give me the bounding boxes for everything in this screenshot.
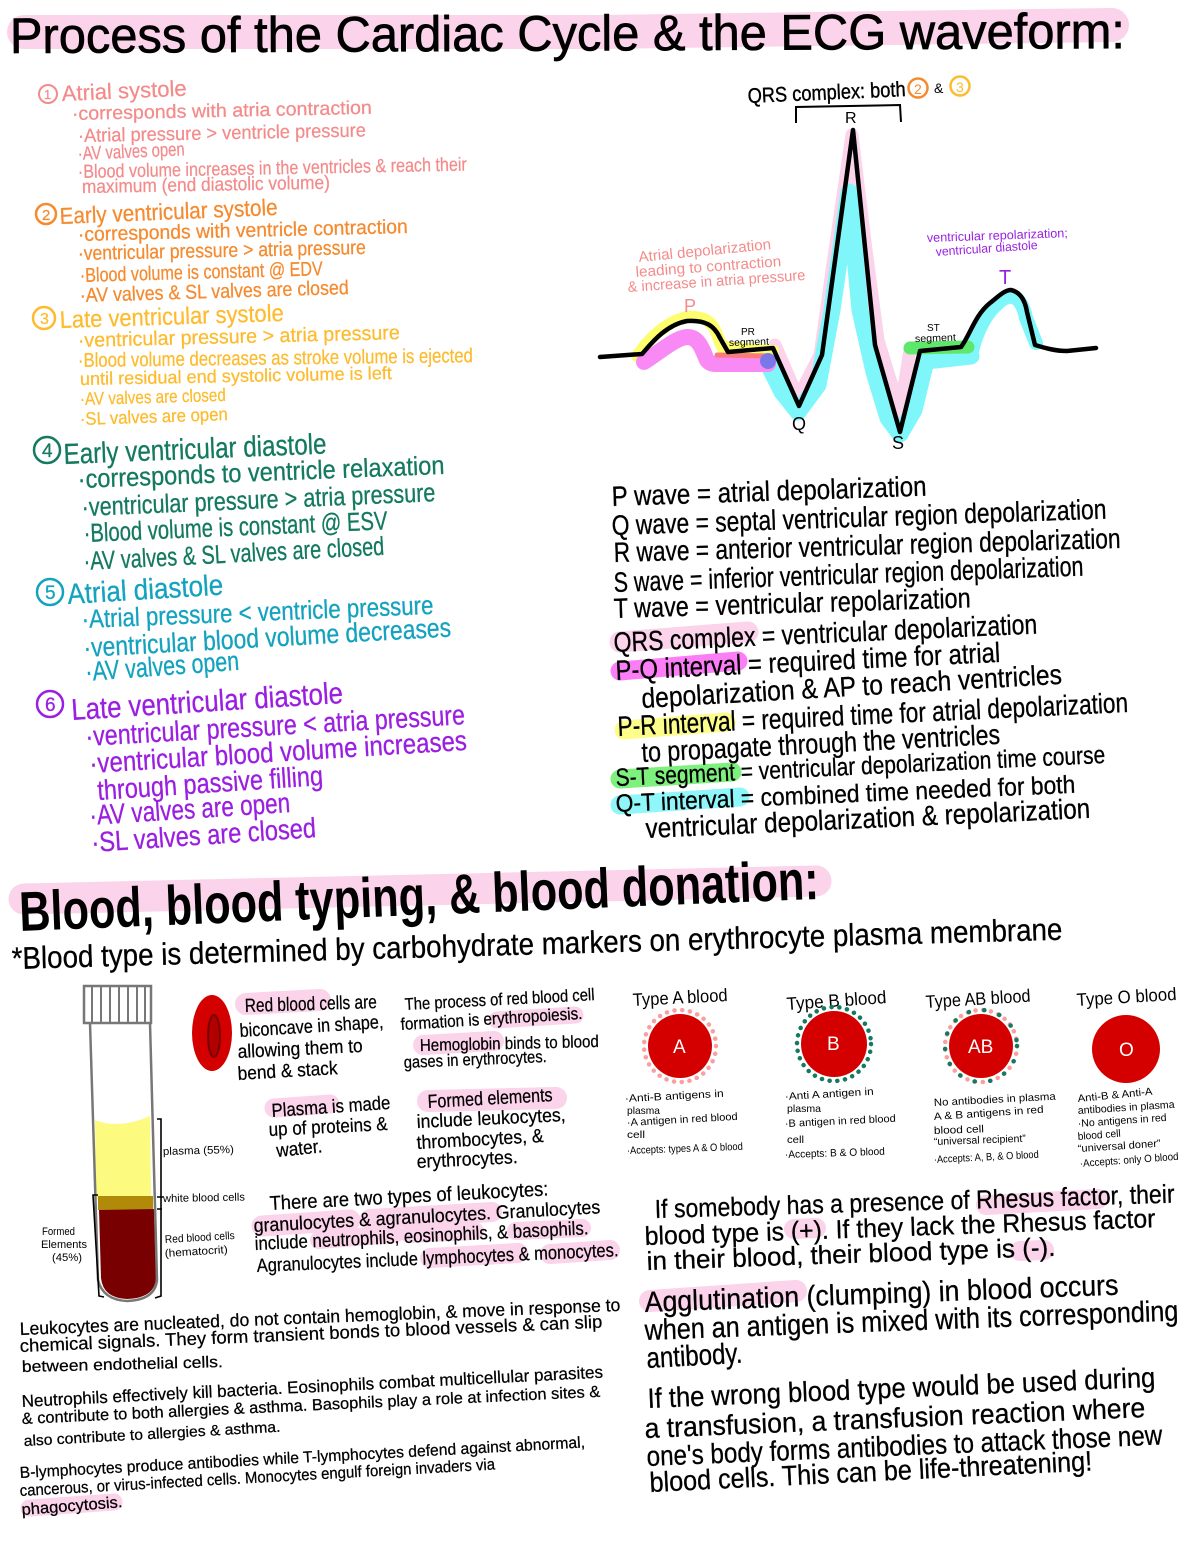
panel: type O blood: blood cell [1077,1128,1121,1143]
panel: type AB blood: A & B antigens in red [933,1104,1044,1123]
panel: agglutination: antibody. [646,1338,743,1375]
QRS complex label and bracket [747,76,970,123]
panel: stage 6 late ventricular diastole: Late ventricular diastole [70,677,344,727]
panel: type O blood: ·No antigens in red [1077,1112,1167,1130]
panel: stage 3 late ventricular systole: ·ventricular pressure > atria pressure [78,322,400,352]
panel: stage 2 early ventricular systole: 2 [42,207,50,224]
panel: stage 1 atrial systole [39,76,468,198]
test tube labels: (hematocrit) [164,1244,228,1260]
P wave note [627,236,806,296]
panel: ECG definitions: T wave = ventricular repolarization [613,582,971,624]
QRS complex label and bracket: QRS complex: both [747,78,906,108]
panel: type AB blood: ·Accepts: A, B, & O blood [934,1149,1039,1166]
panel: type O blood: antibodies in plasma [1077,1099,1175,1117]
test tube labels [41,1144,246,1264]
panel: stage 3 late ventricular systole: ·Blood volume decreases as stroke volume is ejected [78,345,473,372]
panel: stage 3 late ventricular systole: ·AV valves are closed [80,385,226,409]
P wave note: & increase in atria pressure [627,267,806,296]
wave letters: P [684,296,696,316]
panel: blood cell notes: up of proteins & [268,1114,388,1141]
T wave note [927,226,1068,259]
panel: leukocyte details: cancerous, or virus-infected cells. Monocytes engulf foreign invaders via [19,1456,496,1500]
panel: blood cell notes: biconcave in shape, [239,1012,384,1042]
P wave note: Atrial depolarization [638,236,772,266]
panel: blood cell notes: bend & stack [237,1058,339,1085]
panel: type B blood: cell [787,1134,804,1146]
panel: agglutination [643,1270,1179,1375]
panel: ECG definitions: QRS complex = ventricular depolarization [613,609,1038,658]
panel: agglutination: Agglutination (clumping) in blood occurs [644,1270,1119,1319]
panel: stage 2 early ventricular systole: Early ventricular systole [59,194,278,229]
panel: type A blood: ·Accepts: types A & O blood [627,1141,743,1157]
panel: stage 2 early ventricular systole: ·AV valves & SL valves are closed [79,277,349,307]
panel: transfusion reaction: a transfusion, a transfusion reaction where [644,1392,1146,1444]
panel: stage 4 early ventricular diastole: ·Blood volume is constant @ ESV [83,505,388,548]
panel: leukocyte types: granulocytes & agranulocytes. Granulocytes [253,1197,601,1237]
panel: leukocyte details: Neutrophils effectively kill bacteria. Eosinophils combat multicellular parasites [21,1363,603,1411]
panel: stage 5 atrial diastole: ·AV valves open [84,646,240,687]
panel: type B blood: ·B antigen in red blood [785,1113,896,1130]
panel: stage 3 late ventricular systole: Late ventricular systole [59,300,284,334]
panel: stage 1 atrial systole: ·corresponds with atria contraction [72,98,372,125]
panel: leukocyte types: Agranulocytes include lymphocytes & monocytes. [256,1240,619,1277]
panel: leukocyte details: between endothelial cells. [22,1354,223,1376]
panel: stage 4 early ventricular diastole: ·corresponds to ventricle relaxation [77,450,445,494]
icon: red blood cell [192,995,232,1071]
panel: stage 2 early ventricular systole: ·ventricular pressure > atria pressure [78,237,366,265]
panel: stage 1 atrial systole: ·Atrial pressure > ventricle pressure [78,120,366,147]
panel: stage 1 atrial systole: 1 [44,87,51,102]
panel: type O blood: Anti-B & Anti-A [1077,1086,1153,1105]
panel: type AB blood: Type AB blood [925,986,1031,1012]
panel: blood cell notes: Plasma is made [271,1093,391,1122]
segment labels: segment [729,337,769,349]
panel: stage 3 late ventricular systole: 3 [40,311,49,328]
panel: blood cell notes: Red blood cells are [245,992,377,1017]
wave letters: T [999,267,1011,289]
panel: stage 4 early ventricular diastole [34,428,445,576]
panel: stage 4 early ventricular diastole: ·AV valves & SL valves are closed [83,531,385,576]
panel: transfusion reaction: If the wrong blood type would be used during [647,1362,1156,1414]
panel: blood cell notes: gases in erythrocytes. [403,1047,547,1072]
T wave note: ventricular diastole [935,238,1038,259]
panel: type O blood: O [1119,1040,1134,1061]
panel: rhesus factor: blood type is (+). If they lack the Rhesus factor [644,1203,1156,1251]
panel: stage 5 atrial diastole: ·Atrial pressure < ventricle pressure [81,590,434,634]
panel: ECG definitions: depolarization & AP to reach ventricles [641,659,1063,714]
panel: stage 4 early ventricular diastole: 4 [42,441,53,462]
test tube labels: plasma (55%) [163,1144,234,1158]
panel: type O blood: ·Accepts: only O blood [1079,1151,1179,1170]
panel: type A blood: A [673,1037,686,1058]
panel: blood cell notes: water. [274,1136,323,1162]
panel: ECG definitions: P-Q interval = required time for atrial [615,637,1001,686]
panel: transfusion reaction: blood cells. This can be life-threatening! [649,1445,1093,1498]
test tube labels: white blood cells [162,1192,246,1205]
panel: stage 2 early ventricular systole [36,194,408,307]
panel: stage 5 atrial diastole: ·ventricular blood volume decreases [83,612,452,663]
panel: type A blood: ·A antigen in red blood [626,1111,738,1129]
panel: ECG definitions: S-T segment = ventricular depolarization time course [615,741,1106,792]
panel: blood cell notes: formation is erythropoiesis. [400,1004,583,1034]
P wave note: leading to contraction [635,253,782,281]
test tube labels: Elements [41,1239,87,1251]
panel: type O blood: “universal doner” [1077,1138,1162,1155]
panel: ECG definitions: to propagate through the ventricles [641,719,1001,768]
panel: rhesus factor: in their blood, their blood type is (-). [646,1232,1056,1276]
panel: leukocyte details: also contribute to allergies & asthma. [23,1419,281,1450]
panel: stage 6 late ventricular diastole: 6 [45,695,56,716]
panel: blood cell notes: The process of red blood cell [404,985,595,1014]
panel: leukocyte details: chemical signals. They form transient bonds to blood vessels & can slip [19,1312,603,1356]
panel: stage 1 atrial systole: ·AV valves open [77,139,185,165]
panel: blood cell notes: thrombocytes, & [416,1126,544,1154]
panel: stage 2 early ventricular systole: ·corresponds with ventricle contraction [78,216,408,246]
panel: stage 6 late ventricular diastole: ·ventricular pressure < atria pressure [85,699,466,752]
panel: type AB blood: blood cell [934,1123,984,1137]
panel: type AB blood: No antibodies in plasma [934,1091,1056,1109]
diagram: blood test tube [84,986,163,1301]
panel: leukocyte details: phagocytosis. [21,1494,123,1519]
segment labels: ST [927,323,940,334]
wave letters [684,110,1011,453]
test tube labels: (45%) [52,1252,82,1264]
panel: type B blood [784,987,896,1161]
panel: type B blood: B [827,1034,840,1055]
test tube labels: Red blood cells [164,1230,236,1246]
panel: type AB blood [925,986,1056,1166]
T wave note: ventricular repolarization; [927,226,1068,245]
panel: ECG definitions: ventricular depolarization & repolarization [645,793,1091,844]
panel: blood cell notes [237,985,599,1173]
panel: stage 6 late ventricular diastole: through passive filling [96,760,324,806]
panel: type B blood: Type B blood [786,987,887,1014]
panel: stage 2 early ventricular systole: ·Blood volume is constant @ EDV [80,258,324,287]
panel: stage 4 early ventricular diastole: ·ventricular pressure > atria pressure [81,477,436,522]
panel: stage 6 late ventricular diastole: ·ventricular blood volume increases [88,725,468,779]
panel: type A blood: cell [627,1129,645,1141]
panel: type A blood: plasma [627,1105,660,1117]
panel: type O blood [1076,984,1179,1170]
segment labels: segment [915,333,956,345]
panel: leukocyte details: Leukocytes are nucleated, do not contain hemoglobin, & move in response to [19,1295,621,1339]
title: cardiac cycle and ECG: Process of the Cardiac Cycle & the ECG waveform: [10,3,1125,64]
panel: blood cell notes: include leukocytes, [416,1105,566,1133]
panel: stage 1 atrial systole: maximum (end diastolic volume) [82,173,330,198]
segment labels: PR [741,327,755,338]
panel: stage 3 late ventricular systole: ·SL valves are open [79,404,228,429]
panel: type A blood [625,985,743,1157]
panel: stage 6 late ventricular diastole: ·SL valves are closed [90,812,317,858]
chart: ECG waveform [600,76,1096,453]
panel: leukocyte details: B-lymphocytes produce antibodies while T-lymphocytes defend against abnormal, [19,1434,585,1482]
wave letters: R [845,110,857,127]
panel: leukocyte details: & contribute to both allergies & asthma. Basophils play a role at infection sites & [21,1384,601,1428]
panel: stage 1 atrial systole: Atrial systole [61,76,187,106]
panel: type B blood: plasma [787,1103,821,1115]
panel: ECG definitions: P wave = atrial depolarization [611,471,927,512]
panel: leukocyte types: There are two types of leukocytes: [269,1178,549,1215]
panel: stage 3 late ventricular systole: until residual end systolic volume is left [80,363,392,389]
panel: type O blood: Type O blood [1076,984,1177,1010]
panel: type AB blood: AB [968,1037,993,1058]
panel: transfusion reaction [644,1362,1163,1498]
waveform highlights and trace [600,130,1096,434]
panel: type AB blood: “universal recipient” [934,1133,1027,1148]
segment labels [729,323,956,349]
panel: stage 3 late ventricular systole [33,300,473,429]
heading: blood, blood typing and donation: Blood, blood typing, & blood donation: [18,848,820,943]
panel: stage 5 atrial diastole [37,570,452,687]
panel: leukocyte types [253,1178,619,1277]
wave letters: Q [792,414,806,434]
panel: blood cell notes: allowing them to [237,1036,363,1063]
panel: stage 6 late ventricular diastole: ·AV valves are open [88,787,291,831]
panel: type A blood: Type A blood [632,985,728,1010]
panel: blood cell notes: Hemoglobin binds to blood [420,1032,599,1055]
QRS complex label and bracket: & [934,80,944,96]
QRS complex label and bracket: 2 [914,81,922,97]
QRS complex label and bracket: 3 [956,79,964,95]
wave letters: S [892,433,904,453]
panel: stage 6 late ventricular diastole [37,677,468,858]
test tube labels: Formed [42,1226,75,1238]
panel: stage 1 atrial systole: ·Blood volume increases in the ventricles & reach their [78,155,468,183]
panel: blood cell notes: Formed elements [427,1085,553,1113]
panel: rhesus factor [644,1179,1175,1276]
panel: ECG definitions: Q-T interval = combined time needed for both [615,771,1076,818]
panel: stage 5 atrial diastole: 5 [45,583,56,604]
panel: blood cell notes: erythrocytes. [416,1147,518,1173]
panel: stage 4 early ventricular diastole: Early ventricular diastole [63,428,327,471]
panel: type A blood: ·Anti-B antigens in [625,1088,724,1105]
panel: ECG definitions: Q wave = septal ventricular region depolarization [611,494,1107,541]
panel: type B blood: ·Accepts: B & O blood [785,1146,885,1161]
panel: stage 5 atrial diastole: Atrial diastole [66,570,224,611]
subheading: blood type determination: *Blood type is determined by carbohydrate markers on erythrocyte plasma membrane [11,912,1063,976]
panel: leukocyte types: include neutrophils, eosinophils, & basophils. [254,1218,589,1255]
panel: type B blood: ·Anti A antigen in [784,1086,874,1103]
panel: leukocyte details [19,1295,621,1519]
panel: ECG definitions [611,471,1129,844]
